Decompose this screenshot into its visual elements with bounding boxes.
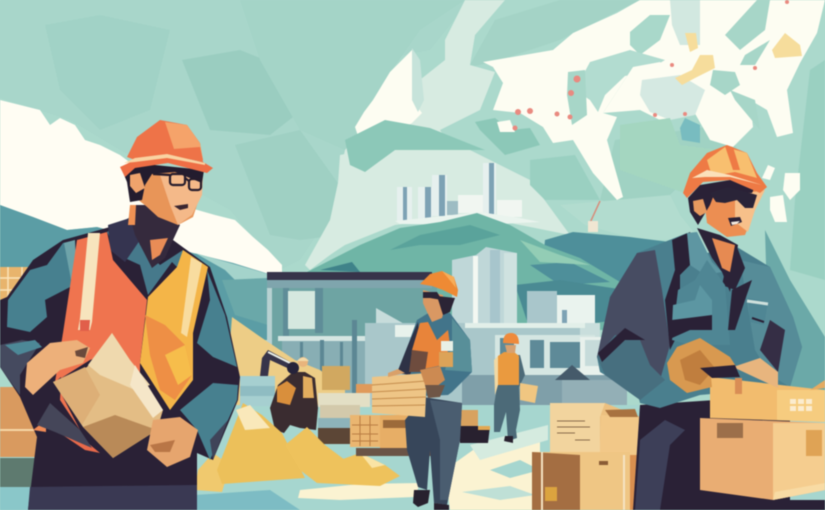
sand pile behind left worker (225, 317, 345, 405)
sunglasses (710, 187, 757, 208)
bag (53, 333, 163, 458)
trousers (28, 485, 197, 510)
helmet (683, 145, 767, 198)
right background buildings (500, 291, 600, 373)
ground (0, 405, 825, 510)
excavator (260, 350, 296, 376)
collar (687, 232, 722, 275)
central tall building (452, 247, 517, 325)
sand piles (195, 403, 400, 492)
vest right panel (140, 250, 208, 410)
left stacked boxes (0, 267, 37, 487)
body silhouette (0, 217, 240, 510)
vest left panel (55, 232, 147, 430)
map: south-sea islands (475, 118, 540, 155)
far worker helmet (503, 333, 519, 344)
hands (667, 338, 737, 393)
hands (388, 369, 405, 377)
map: inner seas (630, 15, 670, 55)
ear (693, 199, 707, 216)
dark hill on the right (540, 232, 670, 290)
face (423, 290, 445, 322)
dark sleeve under bag (37, 403, 92, 448)
helmet (420, 271, 458, 297)
mouth (174, 204, 188, 210)
centre-bottom cardboard boxes (532, 403, 642, 510)
jacket dark left sleeve (597, 250, 670, 400)
left hand (25, 340, 90, 395)
chest (672, 260, 730, 345)
jacket right panel (740, 260, 802, 387)
collar and shirt (107, 217, 185, 295)
helmet (127, 120, 203, 162)
hair (688, 180, 757, 225)
jacket (397, 312, 472, 396)
map: yellow regions (685, 33, 698, 52)
right foreground worker (597, 145, 825, 510)
small worker group (270, 357, 318, 433)
left background hills (0, 205, 282, 340)
boxes right (710, 377, 825, 422)
face (130, 172, 202, 225)
factory structure (267, 272, 627, 415)
far worker (494, 333, 538, 443)
middle worker (372, 271, 472, 510)
right hand (147, 417, 198, 467)
clouds (0, 100, 282, 278)
neck (697, 228, 738, 292)
reflective strips (78, 233, 100, 330)
map: white islands on the right (783, 173, 800, 200)
trousers (405, 397, 462, 505)
pocket (748, 298, 768, 325)
green central hill (307, 213, 625, 330)
glasses (153, 174, 201, 190)
sleeves (7, 240, 75, 332)
hair (122, 163, 204, 202)
boots (413, 490, 430, 507)
hill behind right worker (765, 230, 825, 400)
ear (130, 173, 145, 193)
map: white peninsula (603, 62, 680, 120)
jacket base (597, 233, 802, 408)
world map landmasses (345, 0, 825, 222)
neck (130, 205, 180, 268)
crates below middle worker (350, 415, 433, 456)
crane on hilltop (588, 201, 600, 232)
vest (410, 322, 450, 372)
face (703, 188, 764, 237)
left foreground worker (0, 120, 240, 510)
cart with boxes (459, 410, 490, 443)
map: red location markers (512, 0, 789, 130)
distant skyscrapers (395, 163, 540, 225)
stone blocks (240, 366, 372, 444)
trousers (633, 395, 790, 510)
carried crate (372, 373, 427, 417)
